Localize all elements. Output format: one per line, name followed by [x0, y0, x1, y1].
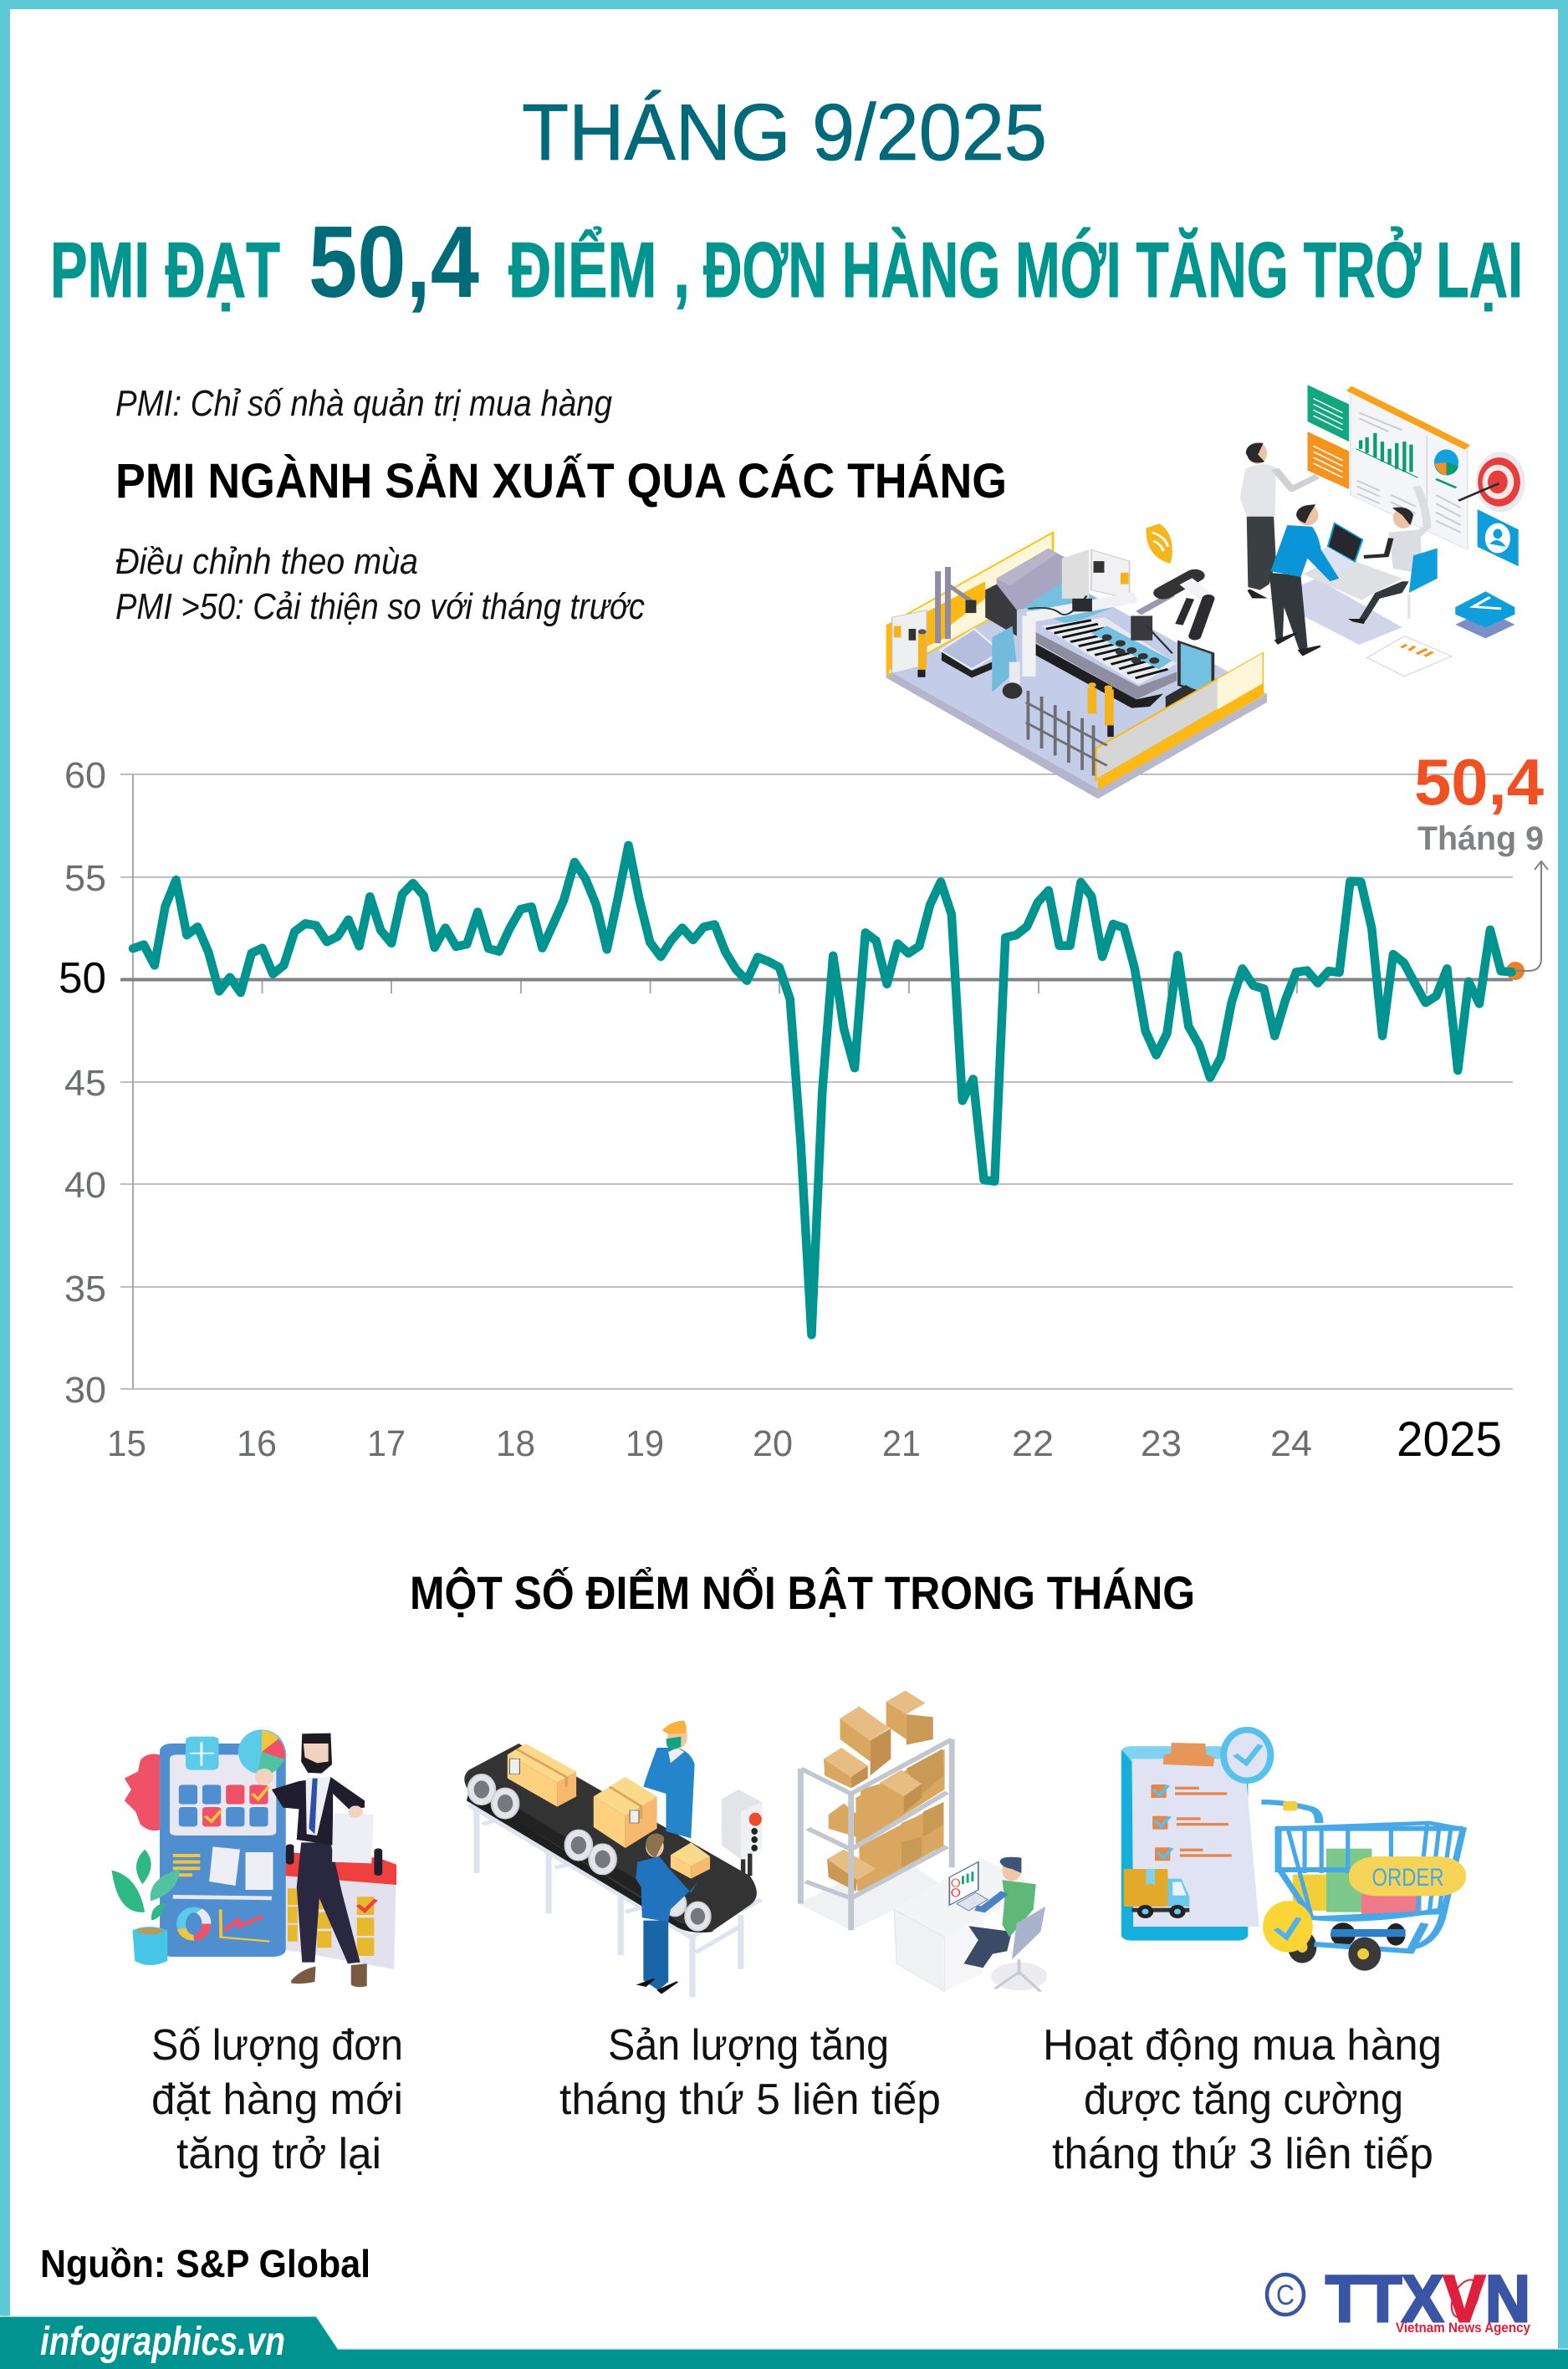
y axis labels: [59, 755, 106, 1411]
x axis labels: 23: [1141, 1423, 1182, 1464]
x axis labels: [107, 1412, 1502, 1467]
icon: conveyor belt with workers: [464, 1720, 762, 1997]
source note: Nguồn: S&P Global: [40, 2242, 370, 2285]
x axis labels: 24: [1270, 1423, 1312, 1464]
callout: month: Tháng 9: [1417, 820, 1544, 857]
icon: warehouse shelf and operator: [799, 1691, 1047, 1992]
illustration: smart factory: [886, 523, 1267, 799]
x axis labels: 22: [1012, 1423, 1054, 1464]
caption: output: tháng thứ 5 liên tiếp: [559, 2075, 941, 2124]
caption: new orders: Số lượng đơn: [151, 2021, 403, 2070]
y axis labels: 45: [64, 1063, 106, 1104]
line chart: PMI by month: [59, 745, 1548, 1467]
panel: output: [464, 1691, 1047, 2124]
connector arrow to latest value: [1515, 861, 1548, 971]
logo: copyright mark: C: [1276, 2280, 1295, 2311]
caption: purchasing: Hoạt động mua hàng: [1043, 2021, 1442, 2070]
y axis labels: 55: [64, 858, 106, 899]
panel: purchasing: [1043, 1727, 1466, 2178]
panel: new orders: [112, 1729, 403, 2178]
x axis labels: 17: [367, 1423, 406, 1464]
caption: output: [559, 2021, 941, 2124]
icon: order checklist and cart: ORDER: [1371, 1863, 1444, 1891]
latest point marker: [1506, 962, 1525, 980]
caption: new orders: tăng trở lại: [176, 2130, 381, 2178]
x axis labels: 18: [496, 1423, 535, 1464]
caption: new orders: đặt hàng mới: [151, 2075, 403, 2124]
site name: infographics.vn: [40, 2320, 285, 2364]
caption: output: Sản lượng tăng: [608, 2021, 889, 2070]
x axis labels: 15: [107, 1423, 146, 1464]
y axis labels: 35: [64, 1269, 106, 1310]
caption: new orders: [151, 2021, 403, 2178]
chart heading: PMI NGÀNH SẢN XUẤT QUA CÁC THÁNG: [115, 454, 1007, 508]
callout: latest value: 50,4: [1414, 745, 1544, 819]
caption: purchasing: được tăng cường: [1084, 2075, 1403, 2124]
icon: businessman with dashboard: [112, 1729, 396, 1987]
icon: order checklist and cart: [1121, 1727, 1466, 1971]
caption: purchasing: tháng thứ 3 liên tiếp: [1052, 2130, 1433, 2178]
headline: value 50,4: 50,4: [309, 205, 479, 319]
headline: [50, 205, 1523, 319]
logo: TTXVN: TTXVN: [1325, 2261, 1530, 2336]
note: seasonally adjusted: Điều chỉnh theo mùa: [115, 541, 418, 582]
y axis labels: 40: [64, 1165, 106, 1206]
x axis labels: 21: [882, 1423, 921, 1464]
x axis labels: 20: [753, 1423, 793, 1464]
x axis labels: 19: [626, 1423, 664, 1464]
headline: diem: ĐIỂM ,: [508, 226, 690, 314]
x axis labels: 2025: [1397, 1412, 1502, 1467]
logo: copyright mark: [1267, 2275, 1304, 2315]
x axis labels: 16: [237, 1423, 277, 1464]
note: PMI above 50: PMI >50: Cải thiện so với tháng trước: [115, 586, 645, 627]
y axis labels: 30: [64, 1370, 106, 1411]
headline: PMI dat: PMI ĐẠT: [50, 226, 280, 314]
section heading: MỘT SỐ ĐIỂM NỔI BẬT TRONG THÁNG: [410, 1566, 1195, 1619]
note: PMI definition: PMI: Chỉ số nhà quản trị mua hàng: [115, 383, 612, 424]
illustration: business team with dashboard: [1240, 385, 1525, 676]
title: month: THÁNG 9/2025: [522, 88, 1047, 177]
logo tagline: Vietnam News Agency: [1396, 2320, 1530, 2336]
caption: purchasing: [1043, 2021, 1442, 2178]
y axis labels: 50: [59, 954, 106, 1003]
footer bar and site tab: [0, 2316, 1568, 2369]
gridlines: [120, 774, 1513, 1389]
PMI line: [133, 845, 1512, 1335]
text block: chart intro: [115, 383, 1007, 627]
y axis labels: 60: [64, 755, 106, 796]
